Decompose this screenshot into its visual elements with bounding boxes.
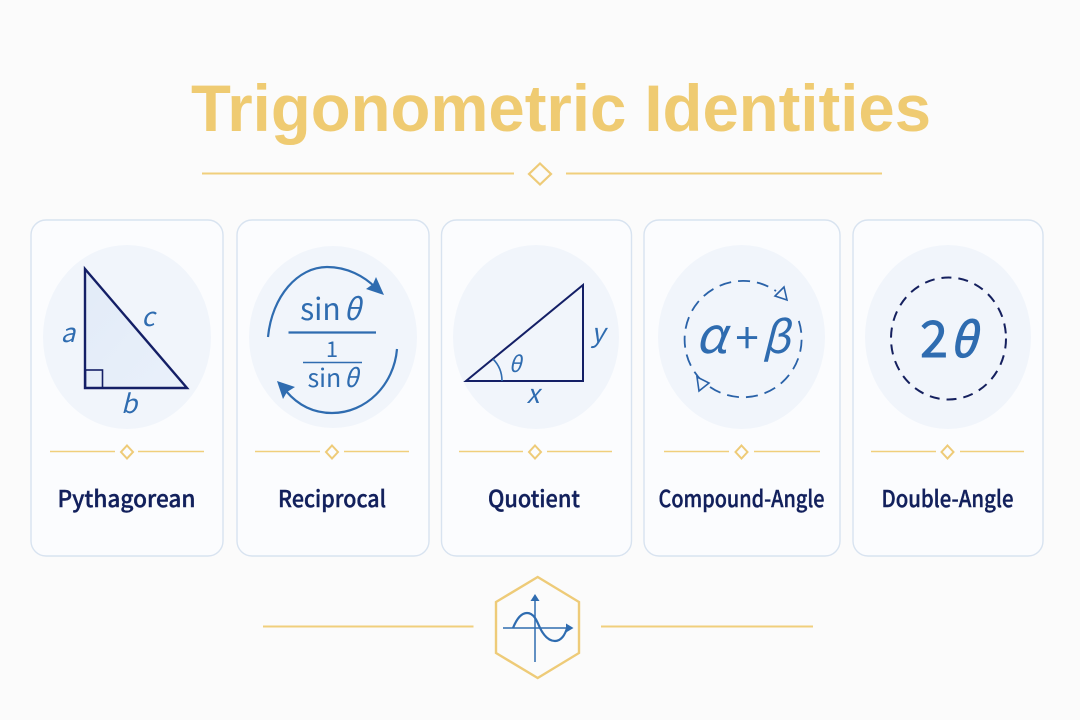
icon: hexagon with sine wave xyxy=(496,577,579,678)
divider xyxy=(871,446,1024,458)
panel: Compound-Angle xyxy=(644,220,840,556)
icon: reciprocal fraction with arrows: sin θ xyxy=(300,285,364,329)
icon: right triangle: c xyxy=(141,297,157,334)
footer divider right xyxy=(601,626,813,628)
icon: reciprocal fraction with arrows xyxy=(268,267,397,413)
footer divider left xyxy=(263,626,474,628)
label: Compound-Angle xyxy=(658,480,824,514)
title: Trigonometric Identities xyxy=(191,71,931,145)
icon: angle triangle: x xyxy=(527,374,543,411)
panel: Pythagorean xyxy=(31,220,223,556)
icon: alpha plus beta with dashed loop: β xyxy=(762,302,793,366)
icon: two theta with dashed circle xyxy=(891,278,1006,400)
label: Double-Angle xyxy=(882,480,1014,514)
icon: right triangle: b xyxy=(121,384,139,421)
panel: Quotient xyxy=(442,220,632,556)
icon: angle triangle: θ xyxy=(509,347,525,379)
icon: alpha plus beta with dashed loop: + xyxy=(735,305,759,366)
label: Reciprocal xyxy=(278,480,386,514)
icon: alpha plus beta with dashed loop xyxy=(685,281,802,397)
icon: right triangle xyxy=(61,269,187,421)
panel: Double-Angle xyxy=(853,220,1043,556)
icon: right triangle: a xyxy=(61,313,77,350)
label: Quotient xyxy=(488,480,580,514)
divider xyxy=(255,446,409,458)
icon: two theta with dashed circle: θ xyxy=(949,302,982,371)
icon: angle triangle xyxy=(466,285,608,411)
divider xyxy=(50,446,204,458)
title divider xyxy=(202,164,882,184)
icon: two theta with dashed circle: 2 xyxy=(920,300,948,372)
panel: Reciprocal xyxy=(237,220,429,556)
icon: reciprocal fraction with arrows: 1 xyxy=(326,332,338,364)
label: Pythagorean xyxy=(58,480,196,514)
divider xyxy=(664,446,820,458)
icon: angle triangle: y xyxy=(590,313,608,350)
divider xyxy=(459,446,612,458)
icon: reciprocal fraction with arrows: sin θ xyxy=(307,359,362,395)
icon: alpha plus beta with dashed loop: α xyxy=(695,296,731,368)
